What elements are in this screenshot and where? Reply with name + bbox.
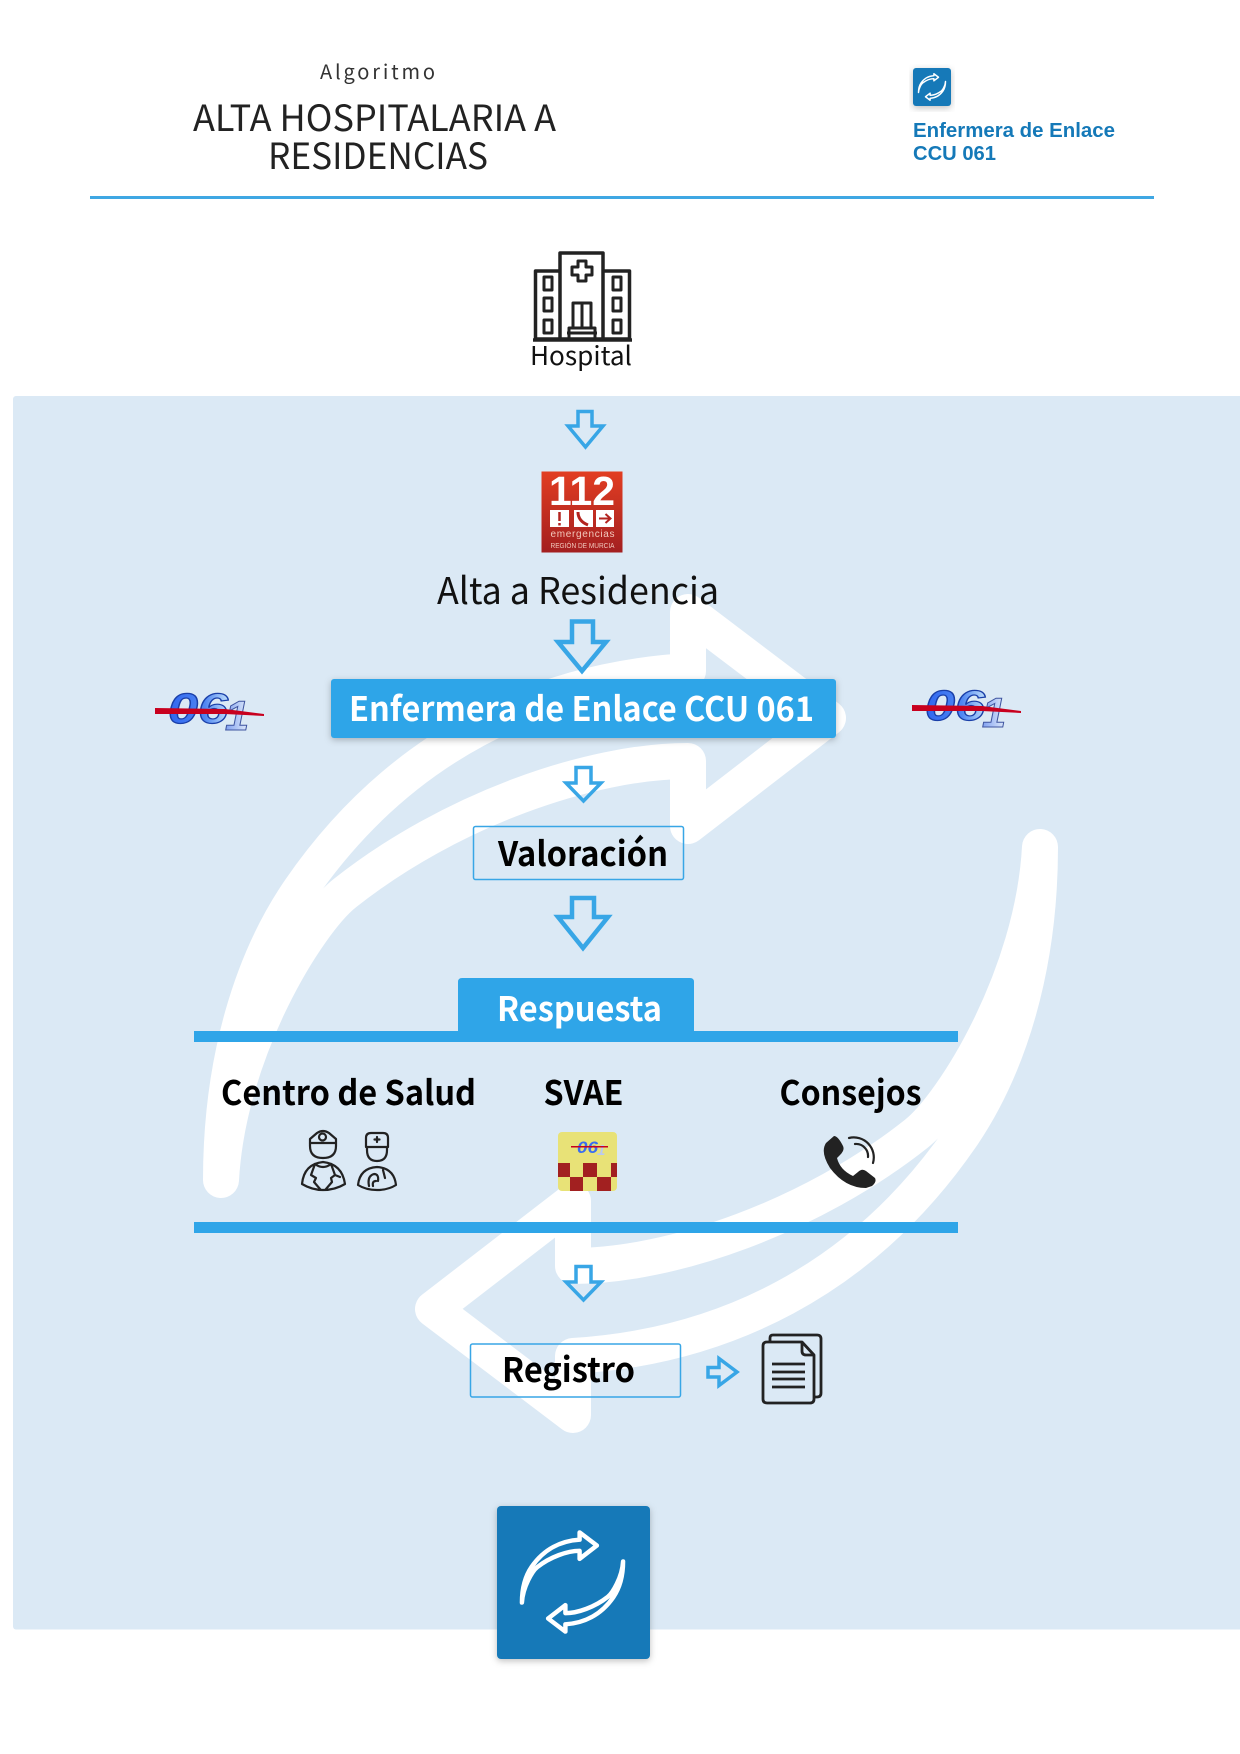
box: Enfermera de Enlace CCU 061: Enfermera de Enlace CCU 061 xyxy=(349,682,814,731)
icon: nurse xyxy=(358,1133,396,1190)
box: Valoracion: Valoración xyxy=(497,827,668,876)
arrow: respuesta to registro xyxy=(566,1266,601,1300)
arrow: valoracion to respuesta xyxy=(558,898,608,948)
icon: hospital building xyxy=(533,253,632,340)
box: Registro: Registro xyxy=(502,1343,635,1392)
option: Centro de Salud xyxy=(221,1066,476,1190)
icon: SVAE ambulance badge: 06 xyxy=(577,1138,599,1157)
label: Hospital: Hospital xyxy=(530,336,632,373)
hospital xyxy=(530,253,632,373)
logo: 061 left: 1 xyxy=(225,692,249,739)
header rule xyxy=(90,196,1154,199)
arrow: registro to documents xyxy=(708,1358,737,1386)
logo: 061 left: 06 xyxy=(168,685,229,733)
icon: 112 emergencias logo: 112 xyxy=(549,468,615,514)
icon: small refresh arrows xyxy=(913,68,951,106)
icon: documents xyxy=(763,1335,821,1403)
subtitle: Algoritmo: Algoritmo xyxy=(320,56,435,85)
panel: flow background xyxy=(13,396,1240,1630)
icon: SVAE ambulance badge: 1 xyxy=(597,1142,605,1159)
icon: 112 emergencias logo: REGIÓN DE MURCIA xyxy=(550,541,614,550)
icon: 112 emergencias logo: emergencias xyxy=(550,529,614,540)
option: Consejos: Consejos xyxy=(780,1066,922,1115)
watermark: large white refresh arrows xyxy=(221,612,1040,1415)
logo: 061 left xyxy=(155,685,264,739)
icon: doctor xyxy=(302,1131,345,1190)
icon: SVAE ambulance badge xyxy=(558,1132,617,1191)
logo text: Enfermera de Enlace xyxy=(913,120,1115,142)
text: Alta a Residencia: Alta a Residencia xyxy=(437,561,719,615)
main title: RESIDENCIAS xyxy=(268,128,488,180)
option: SVAE: SVAE xyxy=(544,1066,624,1115)
box: Registro xyxy=(470,1343,680,1397)
rule: bottom xyxy=(194,1222,958,1233)
logo: 061 right: 1 xyxy=(982,689,1006,736)
icon: 112 emergencias logo xyxy=(542,468,622,552)
logo: 061 right xyxy=(912,682,1021,736)
tab: Respuesta xyxy=(458,978,694,1032)
header logo: Enfermera de Enlace CCU 061 xyxy=(913,68,1115,165)
rule: top xyxy=(194,1031,958,1042)
option: Consejos xyxy=(780,1066,922,1188)
tab: Respuesta: Respuesta xyxy=(497,982,662,1031)
title block xyxy=(193,56,556,180)
arrow: enfermera to valoracion xyxy=(566,768,601,801)
icon: telephone with sound xyxy=(824,1136,876,1188)
section: Respuesta xyxy=(194,978,958,1233)
option: SVAE xyxy=(544,1066,624,1191)
arrow: hospital to 112 xyxy=(568,412,603,447)
arrow: alta to enfermera xyxy=(558,622,606,671)
logo text: CCU 061 xyxy=(913,143,996,165)
logo: large refresh tile xyxy=(497,1506,650,1659)
logo: 061 right: 06 xyxy=(925,682,986,730)
option: Centro de Salud: Centro de Salud xyxy=(221,1066,476,1115)
main title: ALTA HOSPITALARIA A xyxy=(193,90,556,142)
